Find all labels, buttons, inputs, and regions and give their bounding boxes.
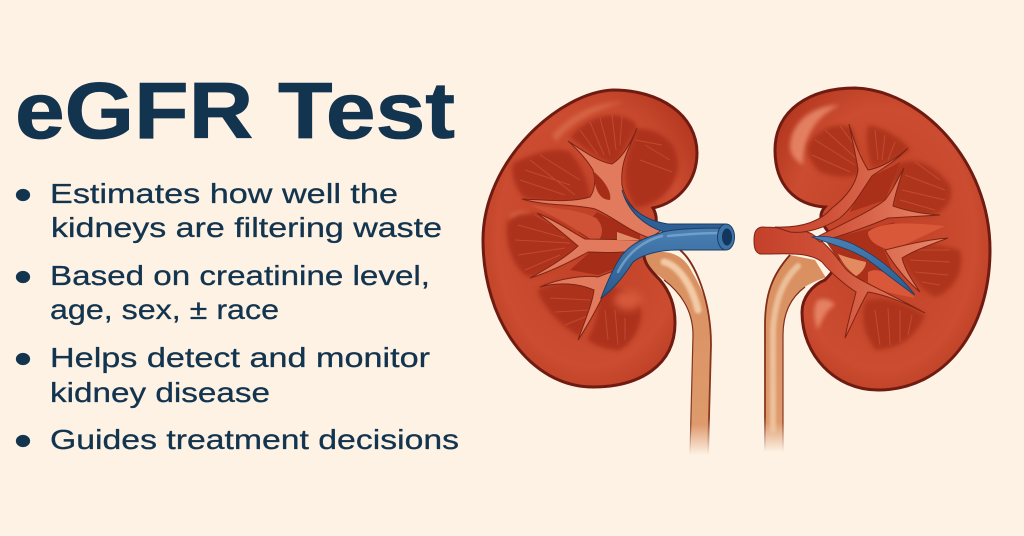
left veins with opening [601, 190, 734, 298]
illustration: left kidney [483, 90, 734, 455]
left kidney striations [515, 115, 672, 345]
upper branch [775, 124, 908, 232]
right kidney striations [812, 126, 950, 345]
artery trunk with lower branch [754, 227, 925, 338]
bullet: estimates: Estimates how well the [50, 178, 398, 209]
bullet: estimates: kidneys are filtering waste [51, 212, 442, 243]
lower branch [540, 270, 616, 340]
right kidney body [775, 88, 990, 390]
illustration: right kidney [754, 88, 990, 452]
bullet: helps detect: kidney disease [50, 377, 270, 408]
left kidney lower lobe glow [614, 290, 642, 310]
left kidney pyramids [507, 115, 678, 350]
right kidney artery and branches [754, 124, 948, 338]
right kidney inner dark areas [825, 162, 900, 290]
bullet: estimates [16, 178, 442, 243]
middle branch [815, 168, 940, 242]
middle branch [530, 213, 645, 278]
bullet: guides treatment: Guides treatment decisions [50, 424, 459, 455]
title: eGFR Test [15, 66, 455, 155]
right vein [812, 236, 915, 295]
left kidney body [483, 90, 697, 387]
bullet: based on [16, 260, 430, 325]
bullet list [16, 178, 459, 455]
right ureter [765, 255, 826, 452]
left kidney inner lobe [530, 205, 602, 243]
right kidney lighter lobes [868, 224, 945, 298]
left kidney sinus pockets [594, 172, 610, 200]
left kidney highlight [510, 102, 625, 226]
bullet: based on: age, sex, ± race [50, 294, 279, 325]
left ureter [636, 250, 711, 455]
outer branch [885, 238, 948, 292]
right kidney pockets [838, 254, 866, 276]
left kidney central cavity [570, 212, 640, 275]
bullet: helps detect [16, 342, 430, 408]
right kidney pyramids [808, 125, 961, 350]
right kidney highlights [790, 105, 840, 330]
upper branch [522, 128, 662, 238]
left kidney sinus branches [522, 128, 662, 340]
bullet: based on: Based on creatinine level, [50, 260, 430, 291]
bullet: helps detect: Helps detect and monitor [50, 342, 430, 373]
